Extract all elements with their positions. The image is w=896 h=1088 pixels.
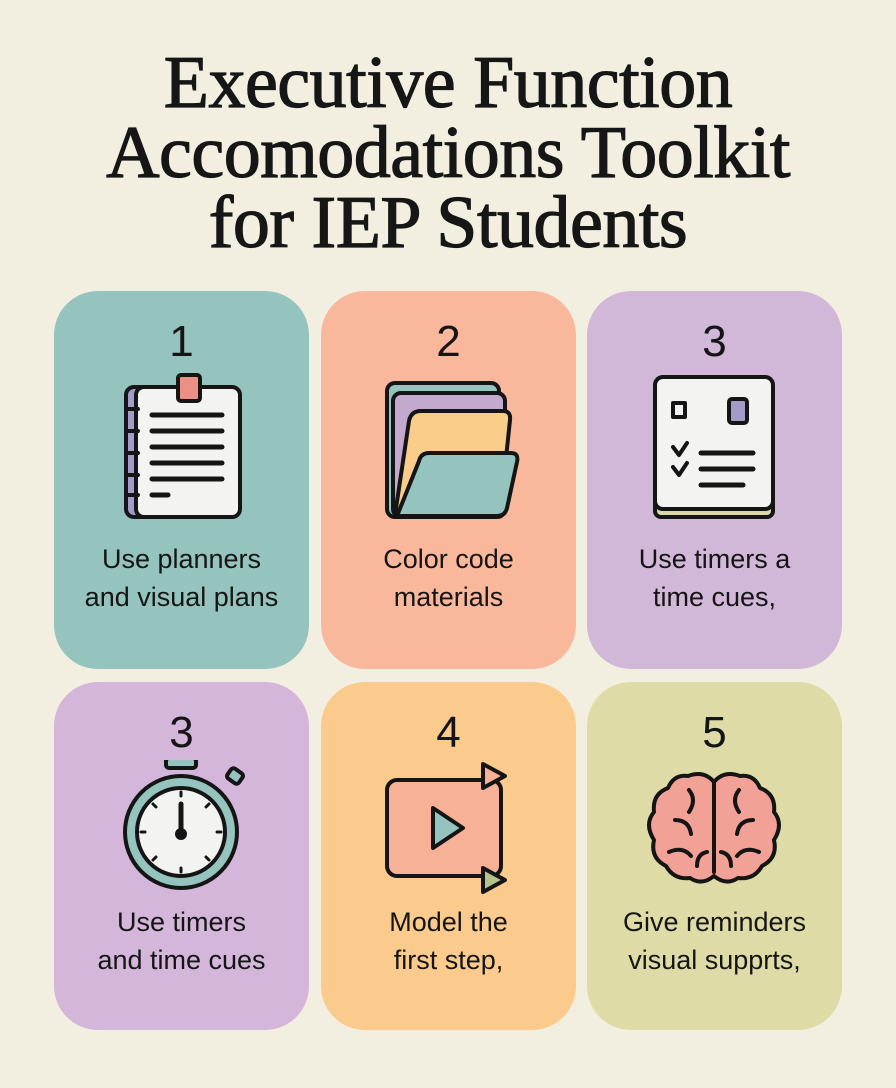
icon: stopwatch [123, 760, 245, 890]
icon: checklist [653, 375, 775, 519]
title [106, 42, 791, 264]
panel: card 1 planners: 1 [169, 317, 194, 366]
panel: card 5 model: first step, [394, 945, 503, 975]
panel: card 6 reminders: Give reminders [623, 907, 806, 937]
panel: card 5 model [321, 682, 576, 1030]
panel: card 1 planners: and visual plans [85, 582, 278, 612]
panel: card 3 checklist: Use timers a [639, 544, 790, 574]
panel: card 4 timers: 3 [169, 708, 194, 757]
panel: card 2 color code: 2 [436, 317, 461, 366]
panel: card 5 model: Model the [389, 907, 508, 937]
icon: planner [124, 373, 242, 519]
panel: card 6 reminders: visual supprts, [628, 945, 801, 975]
panel: card 1 planners: Use planners [102, 544, 261, 574]
panel: card 2 color code [321, 291, 576, 669]
title: Executive Function [164, 42, 732, 124]
panel: card 3 checklist [587, 291, 842, 669]
panel: card 4 timers [54, 682, 309, 1030]
icon: video play [385, 762, 508, 894]
panel: card 4 timers: Use timers [117, 907, 246, 937]
title: for IEP Students [209, 182, 687, 264]
panel: card 6 reminders [587, 682, 842, 1030]
panel: card 4 timers: and time cues [97, 945, 266, 975]
icon: brain [647, 772, 781, 884]
panel: card 6 reminders: 5 [702, 708, 727, 757]
icon: folders [385, 381, 520, 519]
panel: card 1 planners [54, 291, 309, 669]
panel: card 3 checklist: 3 [702, 317, 727, 366]
panel: card 2 color code: Color code [383, 544, 514, 574]
panel: card 3 checklist: time cues, [653, 582, 776, 612]
panel: card 5 model: 4 [436, 708, 461, 757]
title: Accomodations Toolkit [106, 112, 790, 194]
panel: card 2 color code: materials [394, 582, 503, 612]
